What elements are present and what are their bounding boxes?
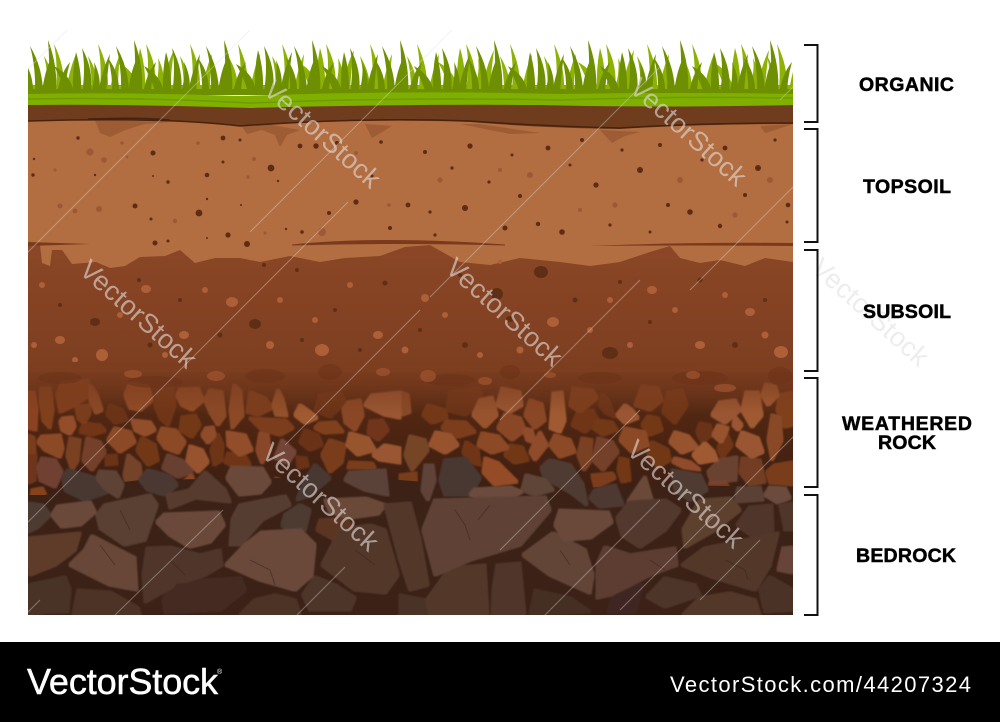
upper grey rocks [28, 458, 790, 540]
dark blades [22, 40, 793, 95]
grass blades [22, 40, 799, 108]
grass band [28, 92, 793, 108]
footer bar [0, 642, 1000, 722]
label: weathered rock: WEATHERED [842, 413, 972, 435]
layer: topsoil [28, 118, 793, 273]
label: weathered rock [842, 413, 972, 454]
topsoil pebbles [31, 136, 790, 247]
bracket: subsoil [804, 250, 818, 371]
subsoil to rock transition [28, 362, 793, 405]
subsoil light pebbles [31, 260, 788, 363]
footer url: VectorStock.com/44207324 [670, 672, 971, 697]
topsoil light speckles [53, 141, 773, 236]
bracket: weathered rock [804, 378, 818, 487]
watermark text: VectorStock [440, 252, 569, 372]
bracket: topsoil [804, 129, 818, 242]
registered mark: ® [217, 668, 223, 676]
label: subsoil: SUBSOIL [863, 301, 951, 323]
light blades [32, 44, 793, 89]
watermark text: VectorStock [74, 254, 203, 374]
rock cracks [100, 505, 748, 585]
labels [842, 74, 972, 567]
bracket: bedrock [804, 495, 818, 615]
watermark text: VectorStock [621, 434, 750, 554]
watermark text: VectorStock [624, 72, 753, 192]
layer: bedrock [28, 458, 793, 615]
watermark text: VectorStock [258, 74, 387, 194]
footer logo: VectorStock [27, 661, 219, 702]
label: weathered rock: ROCK [878, 432, 936, 454]
layer: subsoil [28, 240, 793, 380]
watermark text [74, 72, 753, 557]
layer: weathered rock [28, 380, 793, 495]
layer: organic dark soil [28, 102, 793, 129]
watermark text: VectorStock [256, 437, 385, 557]
watermark outside soil panel: VectorStock [806, 252, 935, 372]
label: topsoil: TOPSOIL [863, 176, 951, 198]
subsoil dark pebbles [58, 263, 767, 359]
bracket: organic [804, 45, 818, 122]
subsoil lenses [28, 240, 793, 246]
label: bedrock: BEDROCK [856, 545, 956, 567]
diagonal watermark lines [28, 30, 793, 615]
label: organic: ORGANIC [859, 74, 954, 96]
soil panel [28, 30, 793, 615]
large boulders [28, 495, 793, 615]
